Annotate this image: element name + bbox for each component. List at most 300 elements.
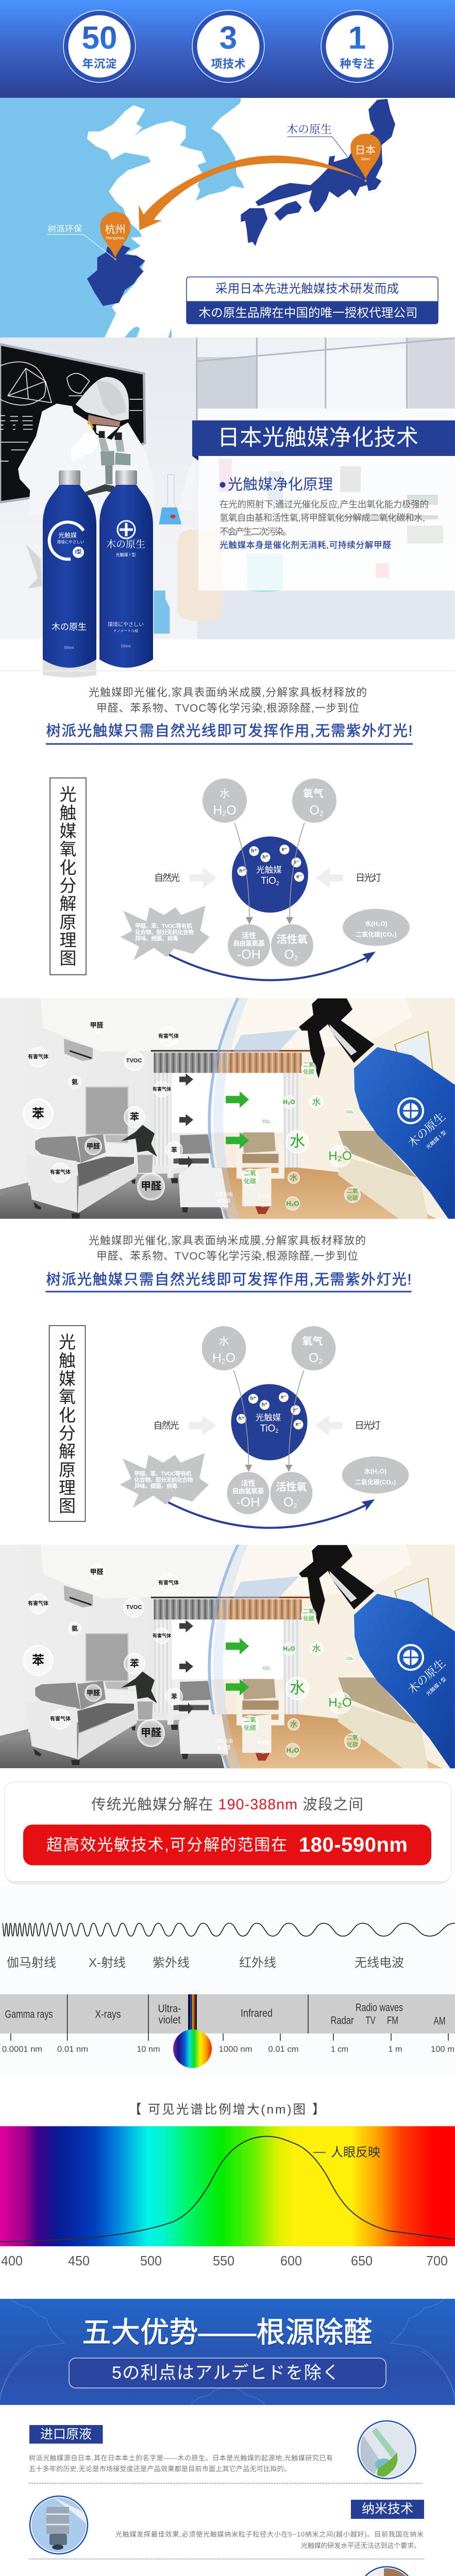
hydroxyl radical circle: 活性 (242, 931, 256, 940)
radical labels on table: -OH (220, 1752, 228, 1757)
pollutant starburst: 异味、细菌、病毒 (134, 1482, 177, 1489)
pollutant starburst (121, 906, 210, 960)
axis numbers: 650 (351, 2253, 373, 2268)
bottle left: 環境にやさしい (57, 539, 84, 544)
panel: map Japan to Hangzhou (0, 98, 438, 337)
oxygen circle: O (309, 1351, 318, 1365)
clean result bubbles: 化碳 (244, 1178, 256, 1185)
fluorescent lamp label and arrow (316, 868, 381, 888)
clean result bubbles: 水 (290, 1174, 298, 1182)
diagram title box: 理 (59, 1479, 76, 1497)
chart: wave frequency (3, 1923, 455, 1936)
catalyst circle: e⁻ (293, 1408, 298, 1413)
oxygen circle: 2 (318, 1357, 323, 1365)
red highlight bar: 180-590nm (299, 1834, 408, 1856)
text block: photocatalyst intro repeated: 树派光触媒只需自然光线即可发挥作用,无需紫外灯光! (46, 1272, 411, 1288)
wave band labels: 无线电波 (355, 1956, 404, 1970)
diagram title box (49, 1326, 86, 1521)
diagram title box: 图 (60, 949, 76, 968)
callout box: 木の原生品牌在中国的唯一授权代理公司 (199, 306, 417, 319)
radical labels on table: 活性氧 (257, 1193, 271, 1199)
radical labels on table: 活性氧 (257, 1740, 271, 1745)
clean result bubbles: H₂O (283, 1098, 295, 1106)
greyscale sofa, cabinet and floor (0, 1634, 228, 1768)
fluorescent lamp label and arrow (315, 1415, 380, 1436)
clean result bubbles: 二氧 (303, 1607, 314, 1615)
bottle brand text: 光触媒 I 型 (425, 1675, 448, 1697)
pollutant bubbles (23, 1018, 183, 1200)
band names (5, 2002, 445, 2027)
pollutant bubbles: 氨 (72, 1624, 78, 1632)
bottle brand text: 木の原生 (406, 1656, 448, 1697)
pollutant bubbles: 有害气体 (158, 1032, 179, 1040)
clean result bubbles: 化碳 (347, 1741, 358, 1748)
catalyst circle: 光触媒 (256, 865, 282, 875)
card: wavelength comparison: 传统光触媒分解在 190-388nm 波段之间 (91, 1797, 363, 1813)
badge: 3 technologies (191, 10, 265, 85)
diagram title box: 解 (60, 894, 76, 913)
bottle logo (398, 1098, 423, 1123)
badge (351, 2500, 424, 2519)
clean result bubbles: CO₂ (346, 1111, 353, 1114)
radical labels on table: 氢氧基 (216, 1198, 231, 1204)
products ellipse: 水(H₂O) (365, 920, 387, 927)
band names: Radar (331, 2014, 353, 2027)
band names: Infrared (241, 2007, 273, 2020)
pin label: Japan (355, 144, 376, 161)
natural light label and arrow (154, 1415, 216, 1436)
hydroxyl radical circle: 自由氢氧基 (233, 940, 265, 947)
wave band labels: 红外线 (239, 1956, 276, 1970)
reaction arrows (234, 823, 305, 924)
radical labels on table: -OH (260, 1203, 268, 1208)
description: 树派光触媒源自日本,其在日本本土的名字是——木の原生。日本是光触媒的起源地,光触媒研究已有 (29, 2454, 333, 2462)
active oxygen circle (271, 924, 313, 967)
subtitle pill: 5の利点はアルデヒドを除く (112, 2363, 340, 2383)
clean result bubbles: 水 (312, 1643, 321, 1654)
text block: photocatalyst intro (46, 687, 413, 745)
advantage 1: imported liquid (29, 2421, 416, 2479)
catalyst circle: h⁺ (250, 1396, 256, 1401)
text block: photocatalyst intro repeated: 光触媒即光催化,家具表面纳米成膜,分解家具板材释放的 (89, 1235, 366, 1247)
water circle: 2 (222, 809, 226, 818)
active oxygen circle: 2 (293, 1501, 297, 1510)
oxygen circle: 氧气 (303, 788, 324, 800)
photo: room before and after repeated (0, 1536, 455, 1775)
products ellipse: 二氧化碳(CO₂) (356, 930, 397, 938)
pollutant bubbles: 有害气体 (28, 1600, 48, 1606)
water circle (203, 778, 247, 823)
card: wavelength comparison (4, 1782, 451, 1885)
clean result bubbles: CO₂ (346, 1657, 353, 1661)
clean result bubbles: H₂O (328, 1696, 352, 1709)
wavelength ticks labels: 1000 nm (218, 2045, 252, 2054)
products ellipse: 二氧化碳(CO₂) (355, 1478, 396, 1486)
bottle logo (398, 1645, 423, 1670)
badge: 50 years: 年沉淀 (82, 58, 116, 70)
blue curved arrow (168, 1499, 375, 1528)
natural light label and arrow: 自然光 (154, 873, 180, 883)
axis numbers: 550 (213, 2253, 234, 2268)
wave band labels: 伽马射线 (7, 1956, 56, 1970)
pollutant bubbles: 甲醛 (87, 1143, 100, 1150)
bottle left: 光触媒 (58, 532, 77, 539)
subtitle pill (69, 2358, 386, 2388)
diagram title box: 光 (59, 1332, 76, 1352)
blue curved arrow (169, 952, 376, 980)
catalyst circle: e⁻ (282, 847, 287, 852)
pollutant bubbles: 有害气体 (28, 1053, 48, 1060)
title band: 日本光触媒净化技术 (217, 426, 418, 450)
clean result bubbles (241, 1061, 361, 1211)
band names: TV (366, 2014, 375, 2027)
wavelength ticks labels: 1 m (389, 2045, 402, 2054)
catalyst circle: 光触媒 (256, 1413, 281, 1422)
clean result bubbles: 二氧 (244, 1170, 256, 1177)
clean result bubbles: CO₂ (262, 1119, 271, 1124)
active oxygen circle: 活性氧 (276, 1481, 307, 1493)
hydroxyl radical circle: 活性 (241, 1479, 256, 1487)
bottle left: 木の原生 (52, 622, 87, 632)
catalyst circle: e⁻ (296, 874, 302, 880)
heading: visible spectrum: 】 (312, 2102, 325, 2116)
bottle brand text: 光触媒 I 型 (425, 1129, 448, 1150)
active oxygen circle: 活性氧 (277, 934, 308, 945)
pollutant bubbles: 甲醛 (90, 1568, 104, 1575)
diagram title box: 氧 (60, 840, 76, 858)
pollutant bubbles: 苯 (130, 1111, 139, 1122)
wave band labels (7, 1956, 404, 1970)
pollutant bubbles: 苯 (171, 1692, 177, 1700)
diagram title box (50, 778, 86, 975)
bottle right: ナノメートル級 (113, 629, 138, 633)
catalyst circle: e⁻ (296, 1422, 301, 1427)
text block: photocatalyst intro: 光触媒即光催化,家具表面纳米成膜,分解家具板材释放的 (89, 687, 367, 699)
pollutant starburst: 异味、细菌、病毒 (135, 935, 178, 942)
water circle: O (226, 803, 237, 818)
axis numbers: 600 (280, 2253, 302, 2268)
bottle brand text: 木の原生 (406, 1110, 448, 1150)
clean result bubbles: 二氧 (347, 1187, 358, 1194)
diagram title box: 原 (60, 913, 76, 931)
bottle right: 光触媒 I 型 (116, 552, 136, 557)
oxygen circle: 2 (319, 809, 324, 818)
principle text: 光触媒本身是催化剂无消耗,可持续分解甲醛 (220, 540, 391, 550)
pollutant bubbles: TVOC (126, 1058, 142, 1064)
wavelength ticks labels: 0.0001 nm (2, 2045, 42, 2054)
badge: 3 technologies: 3 (220, 21, 237, 56)
curve label: 人眼反映 (331, 2145, 380, 2160)
badge (29, 2425, 103, 2444)
diagram title box: 媒 (59, 1369, 76, 1388)
badge: 1 focus: 种专注 (340, 58, 374, 70)
description: 五十多年的历史,无论是市场接受度还是产品效果都是目前市面上其它产品无可比拟的。 (29, 2465, 291, 2473)
pin label: Japan: 日本 (355, 144, 376, 156)
water circle: O (226, 1351, 235, 1365)
scientist at blackboard (0, 344, 155, 515)
wavelength ticks labels: 10 nm (137, 2045, 160, 2054)
radical labels on table: -OH (260, 1750, 268, 1755)
axis numbers: 700 (426, 2253, 448, 2268)
axis numbers (1, 2253, 448, 2268)
map shapes (0, 98, 395, 337)
title band (192, 420, 455, 461)
clean result bubbles: 化碳 (244, 1724, 256, 1732)
pollutant bubbles: 有害气体 (158, 1580, 179, 1586)
fluorescent lamp label and arrow: 日光灯 (356, 873, 381, 883)
principle text (220, 499, 429, 550)
radical labels on table (214, 1191, 271, 1210)
badge: 进口原液 (40, 2427, 92, 2442)
catalyst circle: h⁺ (251, 848, 257, 854)
clean result bubbles: 化碳 (347, 1194, 358, 1201)
pollutant starburst: 甲醛、苯、TVOC等有机 (135, 922, 192, 929)
wavelength ticks labels: 0.01 cm (268, 2045, 299, 2054)
clean result bubbles: 二氧 (347, 1734, 358, 1741)
lab equipment behind panel (219, 459, 443, 544)
bottle left: 500ml (64, 646, 74, 650)
clean result bubbles: H₂O (328, 1149, 352, 1163)
hydroxyl radical circle: -OH (237, 947, 261, 962)
catalyst circle: TiO (261, 876, 276, 886)
diagram title box: 分 (60, 876, 76, 895)
advantage 2: nano technology (30, 2496, 424, 2554)
diagram: photocatalyst oxidation (50, 778, 410, 980)
diagram: photocatalyst oxidation repeated (49, 1326, 409, 1528)
pollutant bubbles: 苯 (171, 1146, 177, 1154)
axis numbers: 450 (68, 2253, 90, 2268)
principle text: 在光的照射下,通过光催化反应,产生出氧化能力极强的 (220, 499, 429, 510)
band names: violet (159, 2014, 181, 2026)
wavelength ticks labels (2, 2045, 454, 2054)
hydroxyl radical circle (228, 924, 270, 967)
header band: 50 / 3 / 1 badges (0, 0, 455, 98)
bottle right: 500ml (121, 645, 131, 648)
badge: 3 technologies: 项技术 (211, 58, 245, 70)
water circle: 水 (218, 1335, 229, 1347)
label: 树派环保: 树派环保 (48, 225, 82, 234)
catalyst circle: e⁻ (294, 859, 299, 866)
banner: five advantages: 五大优势——根源除醛 (82, 2317, 373, 2349)
principle text: 氢氧自由基和活性氧,将甲醛氧化分解成二氧化碳和水, (220, 513, 425, 523)
banner: five advantages: 五大优势——根源除醛 (82, 2316, 372, 2348)
pollutant starburst: 化合物、部分无机化合物 (134, 1476, 193, 1483)
text block: photocatalyst intro repeated (45, 1235, 411, 1292)
catalyst circle: h⁺ (262, 1402, 267, 1408)
band names: X-rays (95, 2008, 121, 2021)
diagram title box: 化 (59, 1405, 76, 1425)
active oxygen circle (270, 1472, 312, 1514)
active oxygen circle: - (298, 948, 300, 955)
catalyst circle: h⁺ (239, 1416, 244, 1422)
pollutant bubbles: 苯 (130, 1658, 139, 1669)
pollutant bubbles: 有害气体 (50, 1716, 71, 1722)
pin label: Hangzhou (105, 224, 126, 240)
wavelength ticks labels: 0.01 nm (57, 2045, 88, 2054)
photo circle (30, 2496, 88, 2554)
label: 木の原生: 木の原生 (287, 123, 332, 136)
pollutant bubbles: 氨 (72, 1078, 78, 1086)
diagram title box: 解 (59, 1442, 76, 1461)
catalyst circle (232, 837, 308, 913)
band names: Gamma rays (5, 2008, 53, 2021)
eye response curve (0, 2137, 455, 2242)
radical labels on table: -OH (220, 1205, 228, 1210)
bottle right: 木の原生 (106, 539, 145, 550)
diagram title box: 氧 (59, 1387, 76, 1406)
catalyst circle (231, 1384, 307, 1460)
hydroxyl radical circle: 自由氢氧基 (232, 1487, 264, 1495)
reaction arrows (234, 1370, 304, 1472)
lab background illustration (0, 337, 455, 639)
callout box: 采用日本先进光触媒技术研发而成 (215, 282, 399, 295)
pollutant bubbles (23, 1564, 183, 1747)
radical labels on table: 活性自由 (214, 1738, 233, 1743)
diagram title box: 触 (60, 804, 76, 822)
pollutant bubbles: 甲醛 (87, 1689, 100, 1697)
pollutant bubbles: 有害气体 (153, 1633, 171, 1638)
advantage 3: lasting purification (29, 2567, 416, 2576)
diagram title box: 化 (60, 858, 76, 877)
radical labels on table: 活性自由 (214, 1191, 233, 1197)
badge: 1 focus: 1 (348, 21, 366, 56)
pollutant bubbles: 苯 (32, 1107, 44, 1121)
product bottles (43, 470, 153, 677)
fluorescent lamp label and arrow: 日光灯 (355, 1420, 380, 1431)
clean result bubbles (241, 1607, 361, 1757)
diagram title box: 分 (59, 1424, 76, 1443)
band names: Ultra- (158, 2003, 181, 2014)
catalyst circle: 2 (276, 880, 279, 887)
clean result bubbles: H₂O (283, 1645, 295, 1652)
pollutant starburst: 化合物、部分无机化合物 (135, 928, 194, 936)
catalyst circle: e⁻ (281, 1394, 287, 1400)
pollutant starburst (120, 1453, 209, 1508)
products ellipse (342, 1456, 409, 1494)
chart: spectrum band (0, 1994, 455, 2068)
clean result bubbles: 水 (312, 1097, 321, 1107)
greyscale sofa, cabinet and floor (0, 1087, 228, 1219)
room illustration (0, 1536, 455, 1775)
pollutant bubbles: 苯 (32, 1654, 44, 1667)
clean result bubbles: H₂O (286, 1199, 299, 1208)
text block: photocatalyst intro: 树派光触媒只需自然光线即可发挥作用,无需紫外灯光! (46, 723, 412, 739)
bottle right (99, 470, 153, 668)
clean result bubbles: CO₂ (262, 1666, 271, 1670)
natural light label and arrow: 自然光 (154, 1420, 179, 1431)
oxygen circle: O (309, 803, 319, 818)
callout box (187, 277, 438, 324)
room illustration (0, 989, 455, 1228)
clean result bubbles: 水 (290, 1720, 298, 1729)
badge: 纳米技术 (362, 2502, 413, 2516)
natural light label and arrow (154, 868, 217, 888)
heading: visible spectrum: 【 (129, 2102, 141, 2116)
red highlight bar (23, 1825, 431, 1865)
translucent white panel (198, 409, 455, 590)
products ellipse: 水(H₂O) (364, 1467, 386, 1475)
photo circle (358, 2567, 416, 2576)
text block: photocatalyst intro: 甲醛、苯系物、TVOC等化学污染,根源除醛,一步到位 (96, 703, 359, 714)
visible light stripe (188, 1994, 197, 2030)
catalyst circle: h⁺ (239, 869, 245, 874)
photo circle (358, 2421, 416, 2479)
panel: electromagnetic spectrum background (0, 1886, 455, 2076)
clean result bubbles: 二氧 (244, 1716, 256, 1723)
banner: five advantages (0, 2299, 455, 2405)
water circle: H (212, 1351, 222, 1365)
pollutant bubbles: TVOC (126, 1604, 142, 1611)
pollutant bubbles: 有害气体 (153, 1086, 171, 1092)
active oxygen circle: - (297, 1495, 299, 1503)
bottle right: 環境にやさしい (108, 621, 144, 628)
diagram title box: 理 (60, 930, 76, 950)
water circle: 2 (222, 1357, 226, 1365)
text block: photocatalyst intro repeated: 甲醛、苯系物、TVOC等化学污染,根源除醛,一步到位 (96, 1250, 358, 1262)
catalyst circle: TiO (260, 1423, 275, 1434)
diagram title box: 光 (60, 785, 76, 804)
description: 光触媒的研发水平还无法达到这个要求。 (301, 2542, 420, 2549)
description (115, 2531, 424, 2549)
principle heading: 光触媒净化原理 (228, 476, 333, 493)
water circle: H (213, 803, 222, 818)
pin label: Hangzhou: 杭州 (105, 224, 126, 235)
badge: 50 years (62, 10, 137, 85)
clean result bubbles: 二氧 (303, 1061, 314, 1068)
axis numbers: 500 (140, 2253, 162, 2268)
pollutant bubbles: 甲醛 (141, 1180, 161, 1192)
catalyst circle: h⁺ (262, 854, 268, 860)
wave band labels: 紫外线 (153, 1956, 190, 1970)
hydroxyl radical circle (227, 1472, 269, 1514)
band names: AM (434, 2015, 445, 2027)
description (29, 2454, 333, 2473)
band names: FM (387, 2014, 398, 2027)
clean result bubbles: H₂O (286, 1747, 299, 1754)
chart: visible spectrum with eye response (0, 2126, 455, 2268)
diagram title box: 触 (59, 1351, 76, 1370)
diagram title box: 图 (59, 1496, 76, 1516)
catalyst circle: 2 (275, 1428, 279, 1434)
hydroxyl radical circle: -OH (237, 1495, 260, 1510)
pollutant starburst: 甲醛、苯、TVOC等有机 (134, 1470, 192, 1477)
pin label: Japan: Japan (360, 158, 370, 161)
wave band labels: X-射线 (89, 1956, 126, 1970)
active oxygen circle: O (284, 947, 294, 962)
badge: 50 years: 50 (82, 21, 117, 56)
pollutant bubbles: 甲醛 (141, 1727, 161, 1739)
band names: Radio waves (356, 2002, 403, 2013)
photo: room before and after (0, 989, 455, 1228)
oxygen circle (292, 778, 336, 823)
bottle left (43, 470, 96, 677)
clean result bubbles: 水 (290, 1133, 305, 1150)
radical labels on table: 氢氧基 (216, 1744, 231, 1750)
clean result bubbles: 化碳 (303, 1068, 314, 1075)
red highlight bar: 超高效光敏技术,可分解的范围在 (46, 1836, 287, 1854)
clean result bubbles: 化碳 (303, 1615, 314, 1622)
bottle left: I型 (75, 548, 81, 555)
badge: 1 focus (320, 10, 394, 85)
principle text: 不会产生二次污染。 (220, 527, 292, 537)
pin dots (114, 179, 367, 261)
diagram title box: 媒 (60, 821, 76, 841)
axis numbers: 400 (1, 2253, 23, 2268)
rainbow ellipse (173, 2029, 212, 2068)
pollutant bubbles: 甲醛 (90, 1021, 104, 1029)
active oxygen circle: 2 (294, 954, 298, 961)
heading: visible spectrum: 可见光谱比例增大(nm)图 (148, 2102, 306, 2116)
